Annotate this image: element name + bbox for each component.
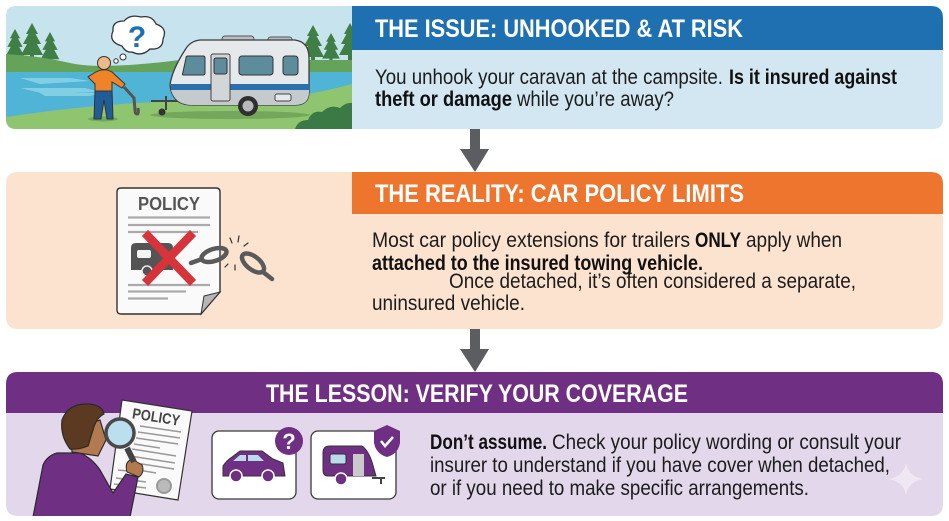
ground shadows <box>150 111 310 119</box>
hand <box>126 459 143 477</box>
card: caravan with shield <box>311 425 400 499</box>
heading: the issue: THE ISSUE: UNHOOKED & AT RISK <box>375 15 743 43</box>
icon: policy document with broken chain: POLICY <box>138 194 200 214</box>
body text: the lesson <box>430 431 901 500</box>
panel: the reality <box>6 172 943 329</box>
body text: the reality: uninsured vehicle. <box>372 292 525 315</box>
panel: the issue <box>6 6 943 129</box>
arrow: issue to reality <box>460 129 489 172</box>
caravan <box>323 446 385 485</box>
illustration: person inspecting policy <box>33 400 192 517</box>
caravan silhouette <box>131 243 173 276</box>
heading: the reality: THE REALITY: CAR POLICY LIMITS <box>375 180 744 208</box>
body text: the lesson: insurer to understand if you have cover when detached, <box>430 454 890 477</box>
policy sheet: POLICY <box>131 405 181 430</box>
person <box>33 404 138 517</box>
body text: the lesson: Check your policy wording or consult your <box>552 431 901 454</box>
body text: the reality: attached to the insured towing vehicle. <box>372 252 703 275</box>
body text: the issue: while you’re away? <box>516 88 674 111</box>
tow hook <box>124 87 138 114</box>
body text: the reality: Most car policy extensions for trailers <box>372 229 690 252</box>
question badge: ? <box>282 429 296 454</box>
body text: the lesson: Don’t assume. <box>430 431 547 454</box>
caravan <box>151 36 309 116</box>
body text: the issue <box>375 66 897 111</box>
body text: the issue: Is it insured against <box>729 66 897 89</box>
arrow: reality to lesson <box>460 329 489 372</box>
card: car with question badge <box>212 427 303 499</box>
body text: the issue: You unhook your caravan at the campsite. <box>375 66 723 89</box>
body text: the reality: apply when <box>746 229 842 252</box>
panel background <box>6 172 943 329</box>
header bar: the issue <box>352 6 943 50</box>
header bar: the lesson <box>6 372 943 413</box>
panel background <box>352 50 943 129</box>
icon: policy document with broken chain <box>117 188 272 314</box>
broken chain <box>191 236 272 279</box>
body text: the reality: ONLY <box>695 229 741 252</box>
shield badge <box>374 425 400 457</box>
trees <box>6 23 352 60</box>
car <box>223 451 285 482</box>
magnifying glass <box>106 419 134 462</box>
body text: the issue: theft or damage <box>375 88 512 111</box>
person <box>88 56 125 119</box>
panel background <box>6 413 943 516</box>
shrubs <box>295 103 352 129</box>
heading: the lesson: THE LESSON: VERIFY YOUR COVERAGE <box>266 380 688 408</box>
body text: the reality <box>372 229 856 315</box>
thought bubble: ? <box>128 21 146 54</box>
header bar: the reality <box>352 172 943 214</box>
illustration: campsite scene <box>6 6 361 129</box>
panel: the lesson <box>6 372 943 517</box>
body text: the lesson: or if you need to make specific arrangements. <box>430 477 809 500</box>
body text: the reality: Once detached, it’s often considered a separate, <box>449 270 856 293</box>
thought bubble <box>112 16 164 63</box>
policy sheet <box>110 400 192 500</box>
red cross <box>145 233 193 283</box>
sparkle <box>889 463 923 495</box>
